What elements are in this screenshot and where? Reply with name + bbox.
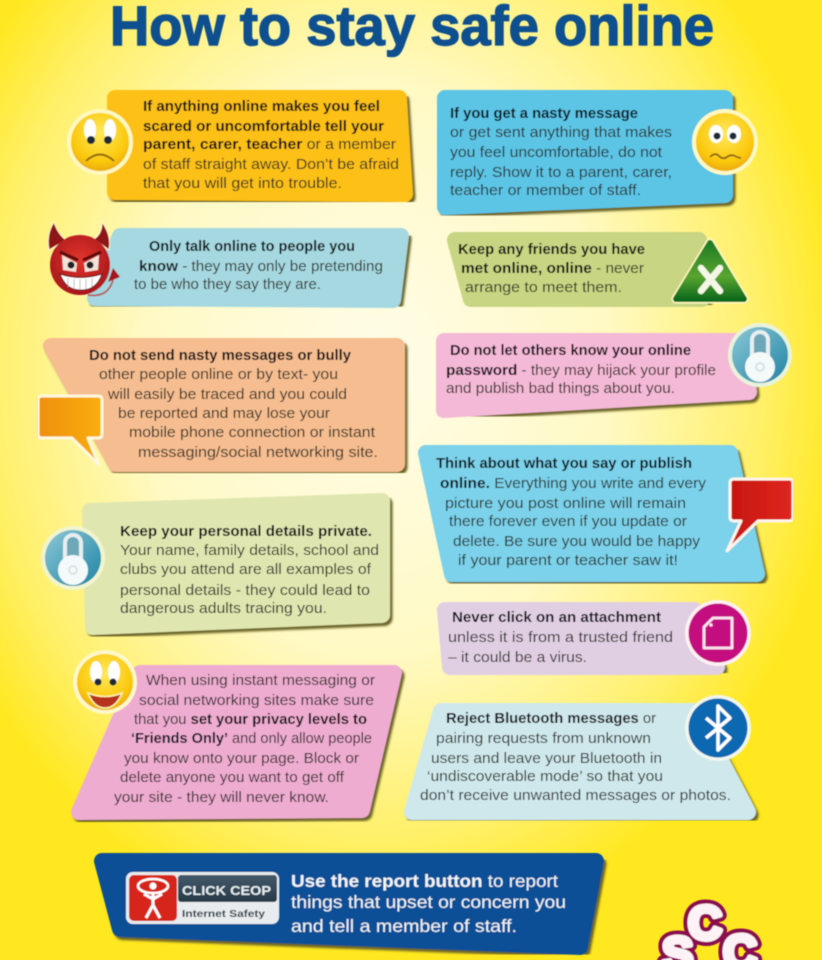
panel: tell an adult: parent, carer, teacher or a member [143, 137, 396, 153]
icon: happy face [73, 650, 137, 714]
panel: personal details [90, 501, 384, 630]
panel: nasty message: or get sent anything that makes [450, 125, 672, 141]
panel: think before publishing [426, 453, 760, 577]
panel: think before publishing: picture you post online will remain [445, 496, 686, 512]
badge: click ceop: Internet Safety [182, 908, 265, 920]
panel: report button [102, 861, 598, 950]
panel: personal details: Your name, family details, school and [120, 543, 379, 559]
badge: click ceop: CLICK CEOP [182, 883, 271, 898]
panel: nasty message [445, 98, 728, 210]
logo: SCC [662, 896, 757, 960]
panel: personal details: Keep your personal details private. [120, 524, 372, 540]
icon: bluetooth [685, 695, 751, 761]
panel: tell an adult: scared or uncomfortable tell your [143, 119, 384, 135]
panel: tell an adult: of staff straight away. Don’t be afraid [143, 157, 399, 173]
panel: personal details: personal details - they could lead to [120, 583, 370, 599]
panel: privacy levels: your site - they will never know. [114, 790, 329, 806]
icon: devil [48, 222, 120, 295]
panel: report button: Use the report button to report [291, 871, 558, 891]
panel: bluetooth: pairing requests from unknown [436, 731, 651, 747]
panel: nasty message: If you get a nasty message [450, 106, 638, 122]
panel: tell an adult: If anything online makes you feel [143, 99, 380, 115]
panel: privacy levels: delete anyone you want to get off [120, 770, 345, 786]
panel: password [444, 341, 752, 413]
panel: password: and publish bad things about you. [446, 381, 675, 397]
panel: do not bully: messaging/social networking site. [138, 445, 378, 461]
panel: report button: things that upset or concern you [291, 892, 566, 912]
panel: do not bully [51, 346, 400, 467]
panel: privacy levels: you know onto your page. Block or [124, 751, 359, 767]
panel: do not bully: mobile phone connection or instant [129, 425, 375, 441]
panel: bluetooth: don’t receive unwanted messages or photos. [420, 788, 731, 804]
icon: green warning triangle [676, 243, 744, 299]
panel: only talk to people you know: know - they may only be pretending [139, 259, 383, 275]
icon: orange speech bubble [38, 396, 102, 465]
icon: padlock left [41, 526, 105, 590]
panel: only talk to people you know [95, 236, 404, 303]
panel: do not bully: be reported and may lose your [118, 406, 330, 422]
panel: password: password - they may hijack your profile [446, 363, 716, 379]
panel: do not bully: other people online or by text- you [99, 367, 338, 383]
panel: attachments [445, 610, 720, 670]
panel: think before publishing: Think about what you say or publish [436, 456, 692, 472]
panel: bluetooth: Reject Bluetooth messages or [446, 711, 656, 727]
icon: sad face [67, 109, 133, 175]
badge: click ceop [126, 872, 279, 924]
panel: personal details: dangerous adults tracing you. [120, 601, 327, 617]
panel: bluetooth [412, 711, 750, 815]
panel: think before publishing: online. Everything you write and every [440, 476, 707, 492]
logo: SCC: C [688, 896, 722, 949]
panel: attachments: Never click on an attachment [452, 610, 661, 626]
panel: report button: and tell a member of staff. [291, 916, 517, 936]
panel: privacy levels: When using instant messaging or [146, 673, 375, 689]
panel: do not bully: will easily be traced and you could [107, 387, 347, 403]
panel: only talk to people you know: Only talk online to people you [149, 239, 355, 255]
panel: friends online: Keep any friends you have [458, 242, 645, 258]
icon: attachment document [685, 600, 751, 666]
panel: think before publishing: if your parent or teacher saw it! [458, 553, 678, 569]
panel: friends online: met online, online - never [461, 261, 644, 277]
icon: padlock right [728, 323, 792, 387]
panel: nasty message: teacher or member of staff. [450, 183, 641, 199]
panel: privacy levels [79, 673, 396, 815]
panel: password: Do not let others know your online [450, 343, 691, 359]
panel: think before publishing: there forever even if you update or [449, 514, 687, 530]
panel: attachments: unless it is from a trusted friend [448, 630, 673, 646]
panel: nasty message: reply. Show it to a parent, carer, [450, 165, 672, 181]
panel: privacy levels: that you set your privacy levels to [134, 712, 367, 728]
panel: privacy levels: ‘Friends Only’ and only allow people [131, 731, 372, 747]
panel: think before publishing: delete. Be sure you would be happy [453, 534, 701, 550]
panel: bluetooth: ‘undiscoverable mode’ so that you [427, 769, 663, 785]
logo: SCC: C [688, 896, 722, 949]
panel: friends online: arrange to meet them. [465, 280, 622, 296]
panel: do not bully: Do not send nasty messages or bully [89, 348, 351, 364]
panel: nasty message: you feel uncomfortable, do not [450, 145, 662, 161]
panel: tell an adult [115, 98, 408, 197]
panel: only talk to people you know: to be who they say they are. [134, 277, 321, 293]
panel: bluetooth: users and leave your Bluetooth in [431, 751, 662, 767]
panel: tell an adult: that you will get into trouble. [143, 176, 342, 192]
icon: worried face [692, 109, 758, 175]
panel: personal details: clubs you attend are all examples of [120, 562, 372, 578]
panel: friends online [455, 240, 704, 302]
panel: attachments: – it could be a virus. [448, 650, 587, 666]
panel: privacy levels: social networking sites make sure [139, 693, 374, 709]
icon: red speech bubble [727, 479, 793, 551]
